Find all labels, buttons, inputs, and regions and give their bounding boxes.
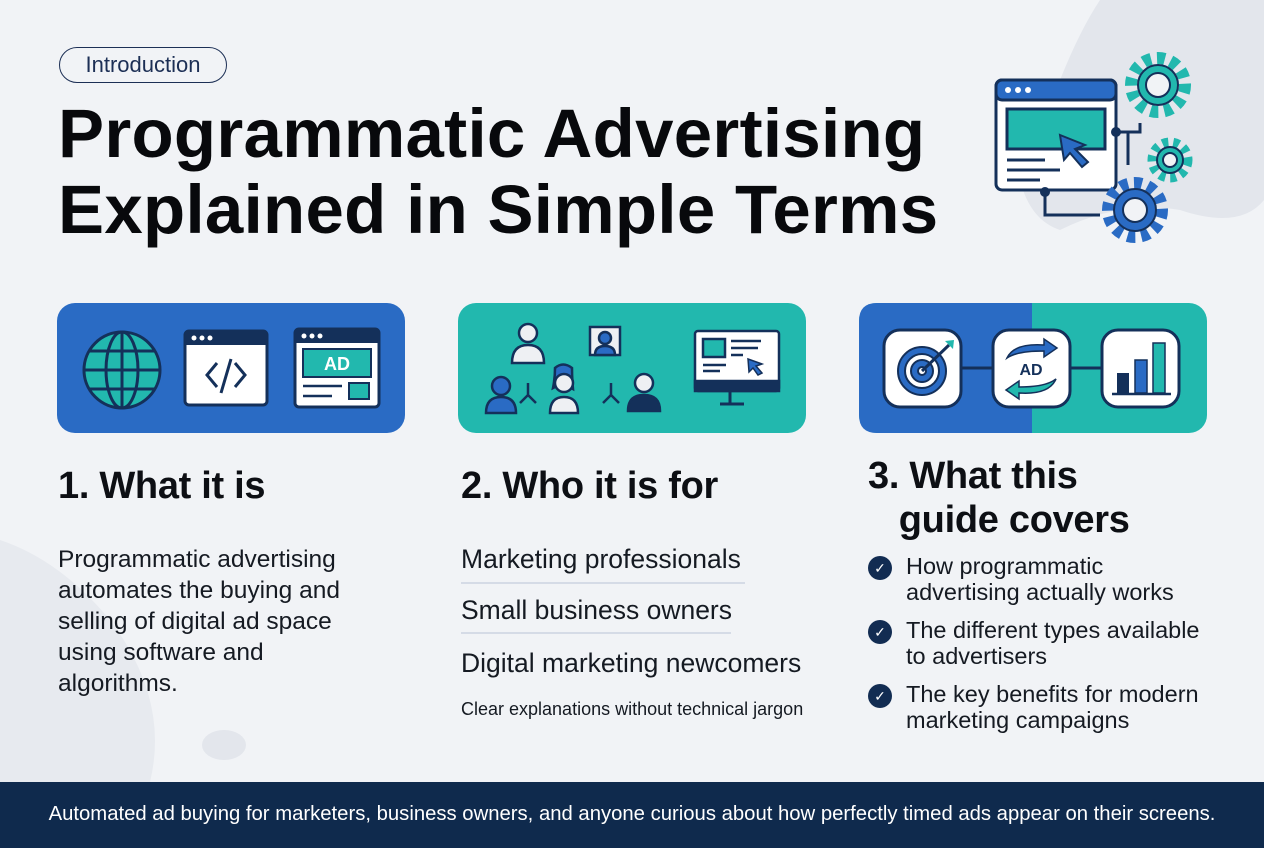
list: guide topics: ✓: [874, 560, 886, 576]
list: guide topics: The key benefits for modern: [906, 681, 1199, 707]
list: guide topics: [868, 553, 1200, 733]
panel: guide covers icons: [859, 303, 1207, 433]
icon: target: [884, 330, 961, 407]
title: [58, 95, 938, 248]
icon: ad window: AD: [324, 354, 350, 374]
icon: bar chart: [1102, 330, 1179, 407]
list: audiences: Digital marketing newcomers: [461, 648, 801, 678]
title: Programmatic Advertising: [58, 95, 925, 172]
list: audiences: Clear explanations without technical jargon: [461, 699, 803, 719]
list: audiences: Small business owners: [461, 595, 732, 625]
list: audiences: [461, 544, 803, 719]
icon: ad window: [295, 329, 379, 407]
footer banner: Automated ad buying for marketers, business owners, and anyone curious about how perfectly timed ads appear on their screens.: [49, 803, 1215, 825]
list: guide topics: ✓: [874, 688, 886, 704]
icon: ad exchange: AD: [1019, 362, 1043, 379]
panel: who it is for icons: [458, 303, 806, 433]
list: guide topics: How programmatic: [906, 553, 1103, 579]
heading: what this guide covers: guide covers: [899, 499, 1130, 541]
list: guide topics: advertising actually works: [906, 579, 1174, 605]
list: audiences: Marketing professionals: [461, 544, 741, 574]
tag: Introduction: [59, 47, 227, 83]
icon: code window: [185, 331, 267, 405]
list: guide topics: ✓: [874, 624, 886, 640]
heading: what this guide covers: [868, 455, 1130, 541]
text: what it is description: Programmatic advertising automates the buying and selling of digital ad space using software and algorithms.: [58, 546, 340, 697]
icon: globe: [84, 332, 160, 408]
tag: Introduction: Introduction: [86, 52, 200, 77]
footer banner: [0, 782, 1264, 848]
title: Explained in Simple Terms: [58, 171, 938, 248]
heading: what this guide covers: 3. What this: [868, 455, 1078, 497]
list: guide topics: to advertisers: [906, 643, 1047, 669]
icon: browser with gears: [994, 52, 1192, 243]
icon: ad exchange: [993, 330, 1070, 407]
list: guide topics: marketing campaigns: [906, 707, 1129, 733]
panel: what it is icons: [57, 303, 405, 433]
heading: who it is for: 2. Who it is for: [461, 465, 718, 507]
heading: what it is: 1. What it is: [58, 465, 265, 507]
list: guide topics: The different types available: [906, 617, 1200, 643]
